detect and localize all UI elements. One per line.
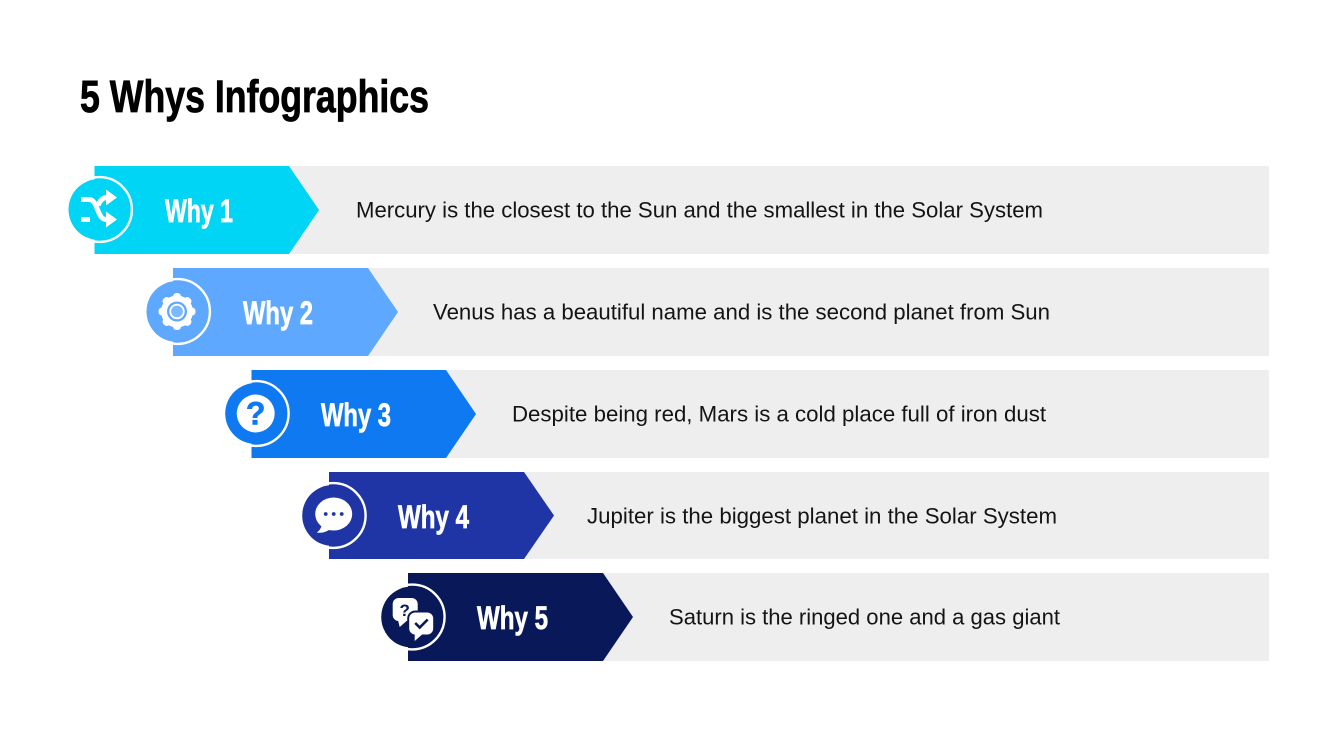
arrow 3 — [252, 370, 476, 458]
text: why 1 description: Mercury is the closest to the Sun and the smallest in the Solar System — [356, 198, 1043, 222]
icon: speech bubble — [301, 483, 366, 548]
label: why 3: Why 3 — [321, 397, 391, 433]
label: why 5: Why 5 — [477, 600, 548, 636]
label: why 2: Why 2 — [243, 295, 313, 331]
text: why 3 description: Despite being red, Mars is a cold place full of iron dust — [512, 402, 1047, 426]
panel: why 2 — [145, 268, 1269, 356]
background bar 1 — [280, 166, 1269, 254]
background bar 5 — [595, 573, 1269, 661]
icon: question and answer bubbles — [380, 585, 445, 649]
title: 5 Whys Infographics — [80, 71, 429, 122]
panel: why 3 — [224, 370, 1269, 458]
background bar 2 — [360, 268, 1269, 356]
label: why 4: Why 4 — [398, 499, 469, 535]
text: why 5 description: Saturn is the ringed one and a gas giant — [669, 604, 1061, 630]
icon: question and answer bubbles: ? — [400, 601, 410, 620]
panel: why 5 — [380, 573, 1269, 661]
arrow 2 — [173, 268, 398, 356]
arrow 4 — [329, 472, 554, 559]
text: why 2 description: Venus has a beautiful name and is the second planet from Sun — [433, 300, 1050, 324]
panel: why 4 — [301, 472, 1269, 559]
arrow 5 — [408, 573, 633, 661]
arrow 1 — [94, 166, 319, 254]
icon: question: ? — [246, 396, 265, 432]
background bar 3 — [438, 370, 1269, 458]
text: why 4 description: Jupiter is the biggest planet in the Solar System — [587, 504, 1057, 528]
icon: shuffle — [67, 177, 132, 242]
label: why 1: Why 1 — [165, 193, 233, 229]
background bar 4 — [516, 472, 1269, 559]
icon: gear — [145, 279, 210, 344]
icon: question — [224, 381, 289, 446]
panel: why 1 — [67, 166, 1269, 254]
